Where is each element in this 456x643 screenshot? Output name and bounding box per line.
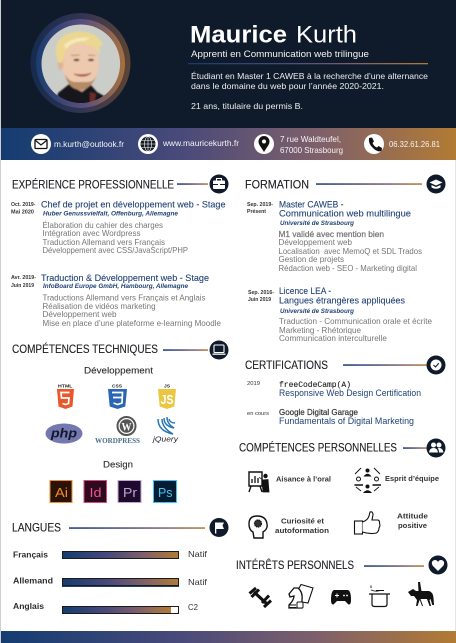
icon: people (426, 438, 446, 458)
degree 2: Université de Strasbourg (280, 308, 354, 315)
website contact: www.mauricekurth.fr (162, 139, 239, 148)
skill: aisance à l'oral (249, 472, 331, 492)
job 2: InfoBoard Europe GmbH, Hambourg, Allemagne (43, 283, 188, 290)
icon: css3 (108, 384, 127, 409)
job 1: Développement avec CSS/JavaScript/PHP (42, 245, 188, 255)
skill: esprit d'équipe: Esprit d’équipe (385, 474, 439, 483)
language bar: français: Français (13, 550, 49, 560)
heading: CERTIFICATIONS (245, 358, 328, 372)
section: certifications (245, 356, 446, 426)
section: expérience professionnelle (11, 174, 228, 328)
skill: esprit d'équipe (354, 468, 439, 493)
language bar: allemand: Allemand (13, 576, 53, 586)
job title: Apprenti en Communication web trilingue (191, 48, 369, 59)
website contact (138, 134, 239, 154)
icon: flag (210, 518, 228, 537)
icon: js (158, 384, 176, 409)
icon: php: php (50, 426, 77, 440)
certification 2: Google Digital Garage (279, 407, 358, 417)
address contact: 67000 Strasbourg (280, 146, 343, 155)
skill: curiosité et autoformation: autoformation (275, 526, 329, 535)
icon: graduation cap (426, 174, 446, 194)
icon: html5: HTML (58, 384, 73, 388)
heading rule (163, 349, 208, 351)
certification 1: Responsive Web Design Certification (279, 388, 421, 398)
icon: illustrator: Ai (55, 485, 68, 500)
icon: html5 (57, 384, 74, 409)
job 1: Traduction Allemand vers Français (42, 237, 165, 247)
icon: wordpress: WORDPRESS (95, 436, 140, 445)
skill: aisance à l'oral: Aisance à l’oral (276, 475, 331, 484)
degree 1: Présent (247, 209, 266, 215)
summary (191, 71, 428, 111)
degree 1 (247, 200, 422, 273)
job 2: Avr. 2019- (11, 275, 36, 281)
heading: INTÉRÊTS PERSONNELS (236, 557, 354, 572)
job 1: Mai 2020 (11, 210, 34, 216)
degree 1: Gestion de projets (278, 254, 344, 264)
icon: js: JS (164, 384, 170, 388)
summary: 21 ans, titulaire du permis B. (191, 101, 303, 111)
degree 1: Master CAWEB - (279, 200, 344, 211)
degree 2: Marketing - Rhétorique (279, 325, 361, 335)
divider (188, 63, 428, 64)
section: compétences techniques (12, 340, 228, 502)
job 1: Élaboration du cahier des charges (42, 220, 163, 230)
icon: illustrator (50, 480, 72, 502)
heading: EXPÉRIENCE PROFESSIONNELLE (12, 176, 174, 192)
phone contact: 06.32.61.26.81 (389, 140, 440, 149)
job 1: Chef de projet en développement web - Stage (41, 200, 226, 211)
icon: indesign: Id (90, 485, 102, 500)
job 2: Juin 2019 (11, 283, 34, 289)
job 1 (11, 200, 226, 255)
phone contact (364, 134, 440, 154)
name: Maurice (190, 22, 287, 48)
summary: Étudiant en Master 1 CAWEB à la recherche d’une alternance (191, 71, 428, 81)
icon: cooking pot (369, 586, 390, 606)
icon: photoshop: Ps (158, 485, 173, 500)
certification 2: Fundamentals of Digital Marketing (279, 416, 414, 426)
degree 1: Sep. 2019- (247, 202, 273, 208)
job 2: Réalisation de vidéos marketing (42, 301, 156, 311)
icon: dumbbell (250, 588, 271, 607)
job 2: Traduction & Développement web - Stage (41, 273, 209, 284)
language bar: anglais: Anglais (13, 602, 45, 611)
heading: LANGUES (12, 520, 61, 534)
icon: wordpress (95, 417, 140, 445)
section: formation (245, 174, 446, 343)
icon: indesign (84, 480, 106, 502)
contact band (1, 128, 456, 160)
heading rule (316, 183, 422, 185)
section: compétences personnelles (239, 438, 446, 538)
job 2 (11, 273, 221, 328)
skill: attitude positive (354, 512, 428, 534)
certification 1: 2019 (247, 381, 260, 387)
icon: gamepad (331, 590, 351, 605)
section: intérêts personnels (236, 556, 448, 608)
degree 2: Communication interculturelle (279, 333, 387, 343)
subheading: développement: Développement (84, 366, 154, 376)
heading rule (177, 183, 208, 185)
section: langues (12, 518, 228, 614)
skill: attitude positive: positive (398, 521, 427, 530)
job 2: Mise en place d’une plateforme e-learning Moodle (42, 318, 221, 328)
degree 1: M1 validé avec mention bien (278, 229, 384, 239)
skill: curiosité et autoformation (249, 516, 329, 538)
icon: laptop (210, 340, 228, 360)
degree 1: Localisation avec MemoQ et SDL Trados (278, 246, 422, 256)
heading: FORMATION (245, 178, 309, 192)
heading rule (364, 565, 424, 567)
skill: curiosité et autoformation: Curiosité et (281, 517, 324, 526)
language bar: anglais: C2 (188, 603, 198, 612)
heading rule (403, 447, 427, 449)
icon: games (289, 584, 313, 608)
certification 1 (247, 380, 421, 398)
language bar: anglais (13, 602, 198, 614)
heading rule (343, 364, 427, 366)
summary: dans le domaine du web pour l’année 2020-2021. (191, 81, 384, 91)
certification 2: en cours (247, 411, 269, 417)
degree 1: Communication web multilingue (279, 208, 411, 220)
icon: briefcase (210, 174, 228, 194)
skill: attitude positive: Attitude (397, 512, 428, 521)
email contact (31, 134, 124, 154)
job 2: Traductions Allemand vers Français et Anglais (42, 293, 206, 303)
degree 1: Rédaction web - SEO - Marketing digital (278, 263, 417, 273)
job 1: Intégration avec Wordpress (42, 228, 140, 238)
certification 2 (247, 407, 414, 426)
degree 2 (248, 286, 432, 343)
job 1: Huber Genussvielfalt, Offenburg, Allemagne (43, 210, 178, 218)
icon: horse rider (408, 582, 434, 606)
degree 2: Traduction - Communication orale et écrite (279, 316, 432, 326)
footer band (1, 631, 456, 643)
address contact: 7 rue Waldteufel, (280, 135, 341, 144)
heading: COMPÉTENCES TECHNIQUES (12, 341, 158, 356)
degree 1: Université de Strasbourg (280, 220, 354, 227)
name part two: Kurth (296, 22, 357, 48)
degree 2: Juin 2019 (248, 297, 271, 303)
subheading: design: Design (103, 460, 133, 470)
icon: badge check (426, 356, 446, 374)
degree 1: Développement web (278, 237, 352, 247)
icon: css3: CSS (112, 384, 122, 388)
icon: php (46, 424, 82, 444)
email contact: m.kurth@outlook.fr (54, 140, 124, 149)
language bar: français: Natif (188, 550, 208, 559)
address contact (254, 134, 343, 155)
heading: COMPÉTENCES PERSONNELLES (239, 440, 397, 455)
profile photo (30, 13, 130, 113)
icon: jquery: jQuery (152, 436, 179, 444)
icon: photoshop (154, 480, 176, 502)
language bar: allemand: Natif (188, 578, 208, 587)
icon: wordpress: W (122, 420, 132, 434)
degree 2: Licence LEA - (279, 286, 331, 297)
job 1: Oct. 2019- (11, 202, 36, 208)
degree 2: Sep. 2016- (248, 290, 274, 296)
icon: premiere: Pr (123, 485, 138, 500)
icon: js: JS (160, 392, 174, 407)
icon: heart (428, 556, 448, 574)
language bar: allemand (13, 576, 208, 587)
job 2: Développement web (42, 309, 117, 319)
language bar: français (13, 550, 208, 560)
icon: premiere (118, 480, 141, 502)
header panel (1, 0, 456, 128)
degree 2: Langues étrangères appliquées (279, 296, 405, 307)
certification 1: freeCodeCamp(A) (279, 380, 351, 390)
icon: jquery (152, 417, 179, 444)
heading rule (69, 527, 205, 529)
